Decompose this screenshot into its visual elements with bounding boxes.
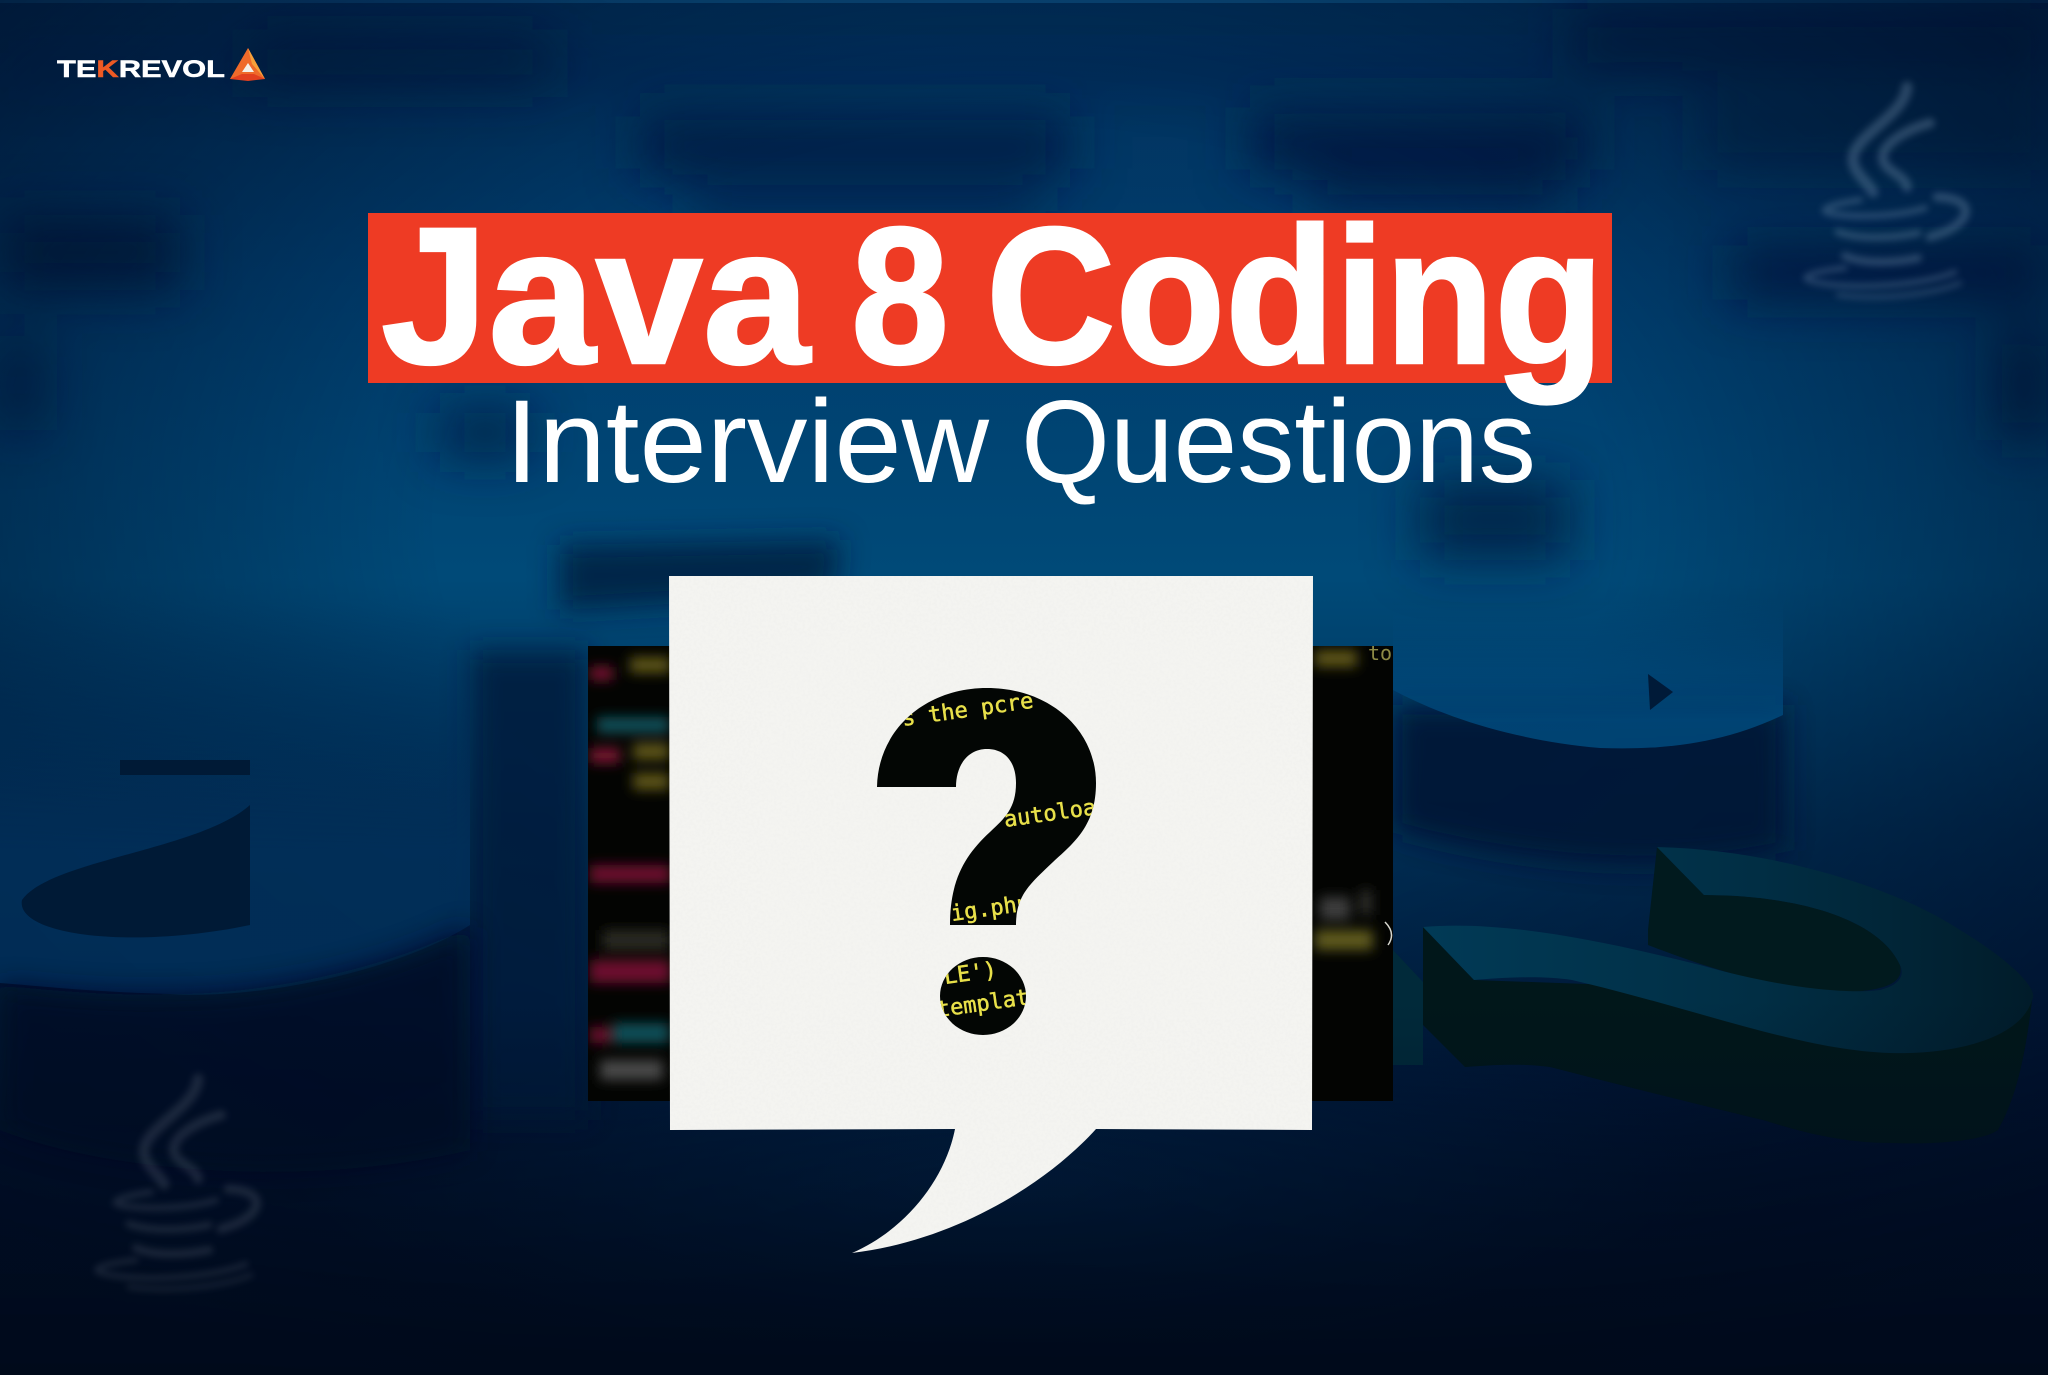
logo: Tekrevol <box>57 48 265 83</box>
title banner: Java 8 Coding <box>368 187 1612 405</box>
subtitle: Interview Questions: Interview <box>505 376 990 508</box>
speech bubble note <box>669 576 1313 1254</box>
subtitle: Interview Questions: Questions <box>1021 376 1536 508</box>
question mark cut-out with code <box>877 688 1096 1035</box>
icon: java cup, upper right <box>1806 87 1966 297</box>
subtitle: Interview Questions <box>505 376 1536 508</box>
question mark cut-out with code: s the pcre <box>900 689 1035 732</box>
letter crescent, right <box>1393 600 1785 865</box>
letter a, lower left <box>0 600 588 1172</box>
title banner: Java 8 Coding: Coding <box>986 187 1604 405</box>
question mark cut-out with code: LE') <box>942 958 998 990</box>
letter s, teal-green lower right <box>1393 847 2033 1143</box>
question mark cut-out with code: template <box>935 983 1044 1023</box>
title banner: Java 8 Coding: 8 <box>851 187 949 405</box>
logo: Tekrevol: TE KREVOL <box>57 56 225 83</box>
title banner: Java 8 Coding: Java <box>381 187 812 405</box>
question mark cut-out with code: autoload <box>1002 793 1111 833</box>
blurred code screen behind the note <box>588 641 1393 1101</box>
question mark cut-out with code: ig.php <box>949 891 1032 927</box>
blurred code screen behind the note: to <box>1368 641 1392 665</box>
icon: java cup, lower left <box>97 1079 257 1289</box>
